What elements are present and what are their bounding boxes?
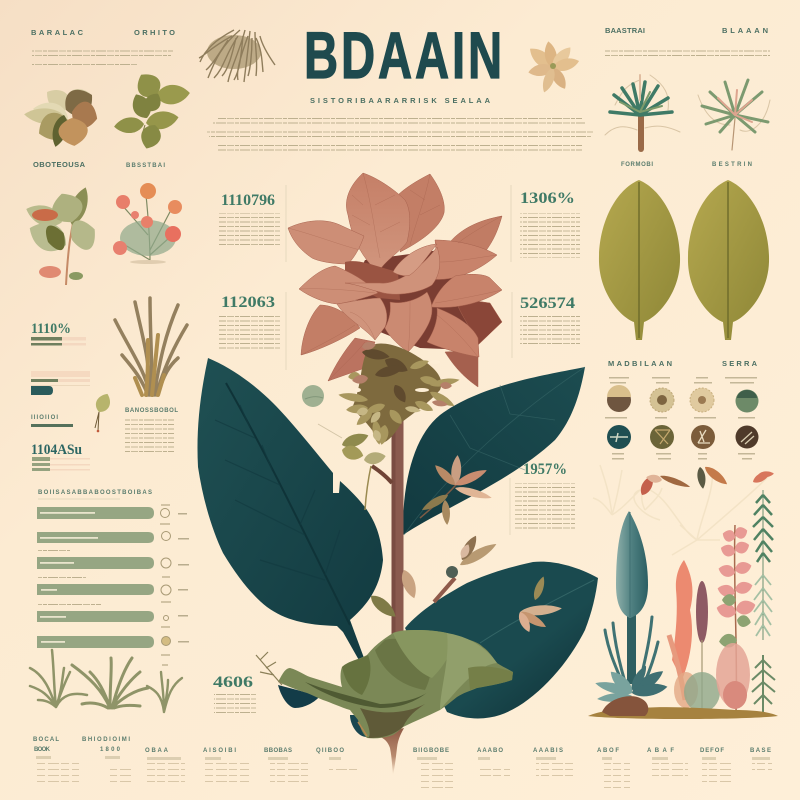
heading: bars list [38,490,152,499]
captions [33,160,165,169]
bottom columns: BBOBAS [264,748,292,754]
green fern [753,490,773,640]
middle petals [431,274,502,307]
right mid headings: MADBILAAN [608,359,672,368]
bottom columns: AAABO [477,748,503,754]
top right headings: BAASTRAI [605,26,645,35]
petal veins [288,173,502,381]
bottom columns: BOOK [34,747,51,753]
faded sketches [593,465,770,555]
lower right leaf [278,562,598,737]
captions: FORMOBI [621,162,653,168]
illustration: spiky palm plant [115,298,187,395]
bottom columns: BOCAL [33,737,59,743]
illustration: grass three [147,672,182,712]
green cabbage base [256,630,513,738]
bottom columns: ABAF [647,748,674,754]
right mid headings [608,359,758,368]
right mid headings: SERRA [722,359,758,368]
left stat: bars four [31,442,90,471]
specimen labels [605,377,757,460]
small dark fern [752,655,775,712]
icon: small sprig [93,391,114,432]
coral spike plant [669,560,698,708]
bar five [37,611,154,630]
small red flowers [638,464,774,497]
illustration: pink and green tussock [698,80,770,150]
left stat: bars two [31,371,90,395]
top right headings [605,26,768,35]
olive leaf left [599,180,680,340]
specimen row one [607,385,758,412]
stat: middle left of flower [219,292,286,370]
illustration: green tussock [605,75,680,149]
sprig on upper right leaf [420,455,493,525]
flower shadow core [350,250,470,350]
bottom columns [33,737,772,790]
stat: lower left: 4606 [213,674,253,691]
bar list [37,507,154,648]
bottom columns: OBAA [145,748,169,754]
big left leaf [197,358,383,662]
left stat: bars three: IIIOIIOI [31,415,58,421]
bottom columns: BIIGBOBE [413,748,449,754]
text block: side note [125,408,178,453]
small green circle marker [302,385,342,438]
stat: middle right of flower [512,292,580,358]
illustration: beige blossom [526,40,581,94]
stat: top right of flower: 1306% [520,190,575,207]
illustration: coral flower bush [113,183,182,264]
bar four [37,584,154,605]
bottom columns: ABOF [597,748,619,754]
ground mound [588,696,778,719]
top right text block [605,48,770,59]
bottom columns: DEFOF [700,748,724,754]
left stat: bars one [31,321,86,346]
olive leaf right [688,180,769,340]
specimen row two [607,425,758,449]
illustration: dried leaf cluster [23,83,101,149]
sprig on stem [399,533,499,600]
bar two [37,532,154,551]
bottom columns: BASE [750,748,771,754]
stat: middle left of flower: 112063 [221,294,275,311]
teal spear plant [594,511,668,703]
main flower [288,173,502,387]
floret cluster [338,341,460,446]
back petals [455,298,502,345]
text block: side note: BANOSSBOBOL [125,408,178,414]
captions: BESTRIN [712,162,752,168]
left stat: bars three [31,415,73,427]
shaded fold behind the centre [345,261,400,300]
bottom columns: BHIODIOIMI [82,737,130,743]
illustration: olive sprig [113,68,191,152]
olive leaves left of stem [340,430,399,621]
stem [365,410,455,775]
purple spike plant [684,581,720,712]
bar three [37,557,154,578]
captions: BBSSTBAI [126,163,165,169]
bar list side labels [178,513,189,642]
bottom columns: 1800 [100,747,121,753]
illustration: dry root tuft [199,30,275,82]
intro text block [207,116,593,153]
upper right leaf [403,367,585,535]
illustration: flowering shrub [23,185,101,285]
top left text block [32,48,173,65]
bottom columns: AISOIBI [203,748,236,754]
top right headings: BLAAAN [722,26,768,35]
captions [621,162,752,168]
illustration: grass one [30,650,87,707]
bar list icons [160,505,171,665]
stat: lower left [213,674,256,713]
title: BDAAIN [304,18,505,92]
illustration: grass two [72,658,148,708]
subtitle: SISTORIBAARARRISK SEALAA [310,96,491,105]
upper petals [450,216,502,252]
bar one [37,507,154,526]
top left headings: BARALAC [31,28,84,37]
top left headings: ORHITO [134,28,175,37]
left stat: bars four: 1104ASu [31,442,82,458]
bar six [37,636,154,648]
sprig on lower leaf [516,575,562,634]
stat: lower right [510,461,575,535]
pink tall plant [715,525,757,712]
stat: lower right: 1957% [523,461,567,478]
stat: top left of flower [219,185,286,262]
stat: middle right of flower: 526574 [520,295,575,312]
bottom columns: AAABIS [533,748,563,754]
left stat: bars one: 1110% [31,321,71,337]
stat: top right of flower [511,185,580,262]
heading: bars list: BOIISASABBABOOSTBOIBAS [38,490,152,496]
top left headings [31,28,175,37]
captions: OBOTEOUSA [33,160,86,169]
bottom columns: QIIBOO [316,748,344,754]
stat: top left of flower: 1110796 [221,192,275,209]
